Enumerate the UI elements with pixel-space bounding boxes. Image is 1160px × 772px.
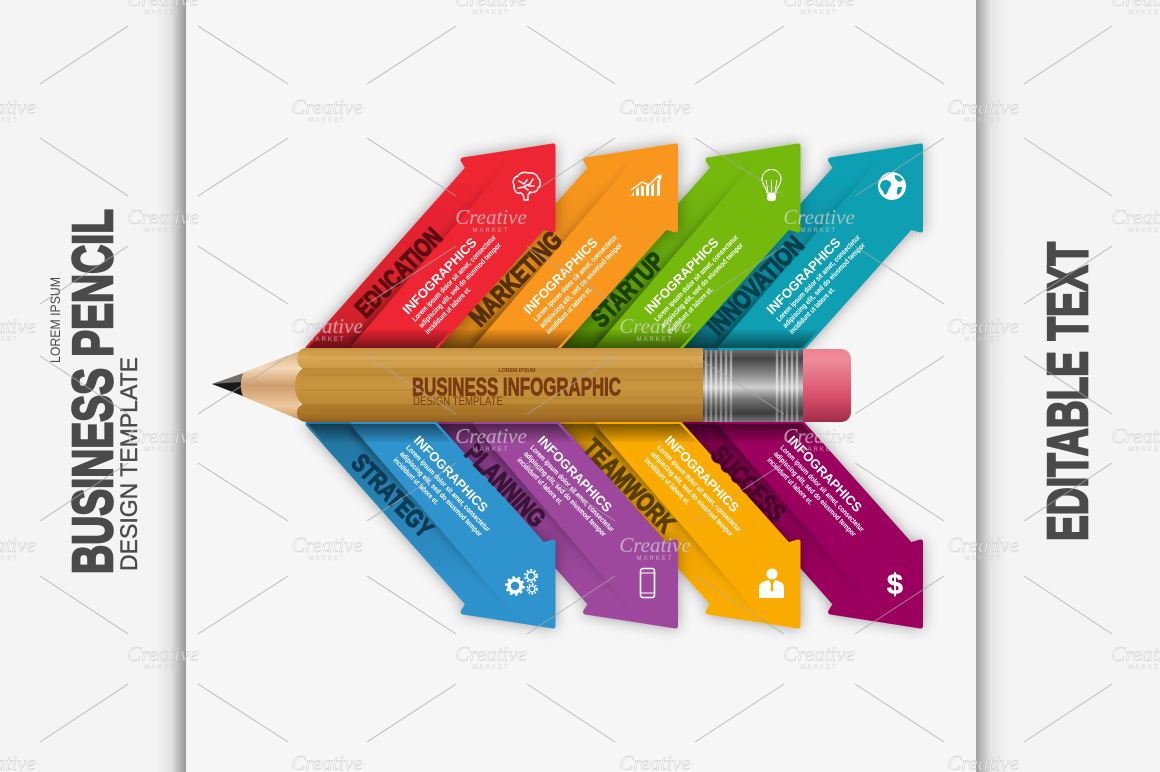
- watermark logos: MARKET: [308, 556, 346, 562]
- text block: startup: adipiscing elit, sed do eiusmod tempor: [659, 241, 745, 330]
- watermark logos: Creative: [619, 95, 691, 119]
- watermark logos: MARKET: [472, 228, 510, 234]
- watermark logos: MARKET: [964, 337, 1002, 343]
- pencil lead: [212, 374, 243, 396]
- watermark logos: Creative: [947, 533, 1019, 557]
- watermark logos: MARKET: [800, 665, 838, 671]
- watermark logos: Creative: [127, 205, 199, 229]
- left side title: [47, 209, 143, 574]
- title: strategy: STRATEGY: [346, 449, 438, 543]
- arrow: innovation: [676, 146, 920, 348]
- watermark logos: MARKET: [144, 228, 182, 234]
- watermark logos: MARKET: [964, 118, 1002, 124]
- design template subheading: DESIGN TEMPLATE: [116, 357, 143, 571]
- text block: startup: Lorem ipsum dolor sit amet, consectetur: [652, 233, 740, 323]
- text block: success: adipiscing elit, sed do eiusmod tempor: [772, 449, 858, 538]
- text block: marketing: adipiscing elit, sed do eiusmod tempor: [538, 241, 624, 330]
- watermark logos: MARKET: [144, 665, 182, 671]
- title: startup: STARTUP: [586, 247, 670, 333]
- text block: startup: incididunt ut labore et.: [665, 285, 715, 336]
- watermark logos: Creative: [455, 205, 527, 229]
- icon: growth chart: [631, 174, 662, 196]
- pencil wood top facet: [297, 348, 703, 369]
- icon: businessman: [759, 568, 784, 598]
- watermark logos: Creative: [619, 314, 691, 338]
- arrow: success: [676, 424, 920, 626]
- wood grain: [300, 355, 700, 416]
- icon: smartphone: [640, 568, 654, 598]
- watermark logos: MARKET: [636, 118, 674, 124]
- pencil label: [412, 368, 621, 408]
- watermark logos: MARKET: [472, 10, 510, 16]
- watermark logos: MARKET: [800, 447, 838, 453]
- pencil cone: [213, 351, 300, 420]
- icon: globe: [878, 172, 906, 200]
- title: teamwork: TEAMWORK: [578, 434, 680, 539]
- text block: strategy: Lorem ipsum dolor sit amet, consectetur: [404, 443, 492, 534]
- arrow: planning: [430, 424, 676, 626]
- watermark logos: Creative: [127, 424, 199, 448]
- pencil wood middle facet: [295, 368, 703, 405]
- watermark logos: Creative: [291, 533, 363, 557]
- text block: strategy: incididunt ut labore et.: [391, 456, 441, 506]
- watermark logos: MARKET: [144, 10, 182, 16]
- text block: success: INFOGRAPHICS: [785, 433, 865, 515]
- watermark logos: Creative: [783, 205, 855, 229]
- arrow: teamwork: [553, 424, 798, 626]
- text block: marketing: Lorem ipsum dolor sit amet, consectetur: [531, 233, 619, 323]
- arrow: marketing: [430, 146, 676, 348]
- text block: planning: incididunt ut labore et.: [515, 456, 565, 506]
- right side title: editable text: EDITABLE TEXT: [1036, 242, 1100, 541]
- text block: marketing: incididunt ut labore et.: [544, 285, 594, 336]
- text block: education: incididunt ut labore et.: [423, 285, 473, 336]
- text block: startup: INFOGRAPHICS: [641, 234, 722, 317]
- watermark logos: MARKET: [800, 228, 838, 234]
- icon: gears: [506, 570, 537, 594]
- watermark logos: Creative: [291, 95, 363, 119]
- text block: innovation: Lorem ipsum dolor sit amet, consectetur: [774, 233, 862, 323]
- pencil label: BUSINESS INFOGRAPHIC: [412, 374, 621, 402]
- title: planning: PLANNING: [459, 439, 551, 533]
- ferrule ribs: [706, 350, 797, 422]
- watermark logos: Creative: [947, 314, 1019, 338]
- icon: light bulb: [762, 170, 781, 201]
- arrow: education: [308, 146, 553, 348]
- text block: success: incididunt ut labore et.: [765, 456, 815, 506]
- pencil: [212, 348, 851, 422]
- text block: teamwork: Lorem ipsum dolor sit amet, consectetur: [655, 443, 743, 534]
- watermark logos: MARKET: [636, 556, 674, 562]
- arrow: strategy: [308, 424, 553, 626]
- watermark logos: MARKET: [800, 10, 838, 16]
- text block: marketing: INFOGRAPHICS: [520, 234, 601, 317]
- watermark logos: Creative: [127, 642, 199, 666]
- watermark logos: MARKET: [308, 337, 346, 343]
- title: innovation: INNOVATION: [702, 231, 810, 341]
- watermark logos: MARKET: [472, 447, 510, 453]
- text block: innovation: adipiscing elit, sed do eiusmod tempor: [781, 241, 867, 330]
- watermark logos: Creative: [783, 642, 855, 666]
- text block: teamwork: incididunt ut labore et.: [642, 456, 692, 506]
- watermark logos: MARKET: [144, 447, 182, 453]
- pencil ferrule: [703, 350, 803, 422]
- text block: education: INFOGRAPHICS: [399, 234, 480, 317]
- business pencil heading: BUSINESS PENCIL: [61, 209, 125, 574]
- bottom arrow titles: [346, 434, 791, 543]
- text block: planning: INFOGRAPHICS: [535, 433, 615, 515]
- text block: teamwork: adipiscing elit, sed do eiusmod tempor: [649, 449, 735, 538]
- watermark logos: MARKET: [472, 665, 510, 671]
- pencil wood bottom facet: [297, 404, 703, 422]
- title: marketing: MARKETING: [464, 226, 568, 332]
- watermark logos: Creative: [619, 533, 691, 557]
- icon: brain: [513, 172, 540, 200]
- text block: planning: adipiscing elit, sed do eiusmod tempor: [522, 449, 608, 538]
- text block: success: Lorem ipsum dolor sit amet, consectetur: [778, 443, 866, 534]
- arrow: startup: [553, 146, 798, 348]
- watermark logos: Creative: [455, 642, 527, 666]
- text block: innovation: incididunt ut labore et.: [787, 285, 837, 336]
- pencil label: DESIGN TEMPLATE: [413, 396, 503, 408]
- title: education: EDUCATION: [350, 223, 448, 323]
- pencil label: LOREM IPSUM: [498, 368, 536, 374]
- watermark logos: Creative: [783, 424, 855, 448]
- watermark logos: Creative: [947, 95, 1019, 119]
- watermark logos: MARKET: [308, 118, 346, 124]
- watermark logos: MARKET: [964, 556, 1002, 562]
- text block: innovation: INFOGRAPHICS: [763, 234, 844, 317]
- text block: education: Lorem ipsum dolor sit amet, consectetur: [410, 233, 498, 323]
- title: success: SUCCESS: [705, 441, 791, 528]
- watermark logos: MARKET: [636, 337, 674, 343]
- text block: strategy: adipiscing elit, sed do eiusmod tempor: [398, 449, 484, 538]
- text block: education: adipiscing elit, sed do eiusmod tempor: [417, 241, 503, 330]
- top arrow titles: [350, 223, 810, 341]
- pencil eraser: [803, 349, 851, 422]
- icon: dollar: $: [887, 569, 903, 601]
- lorem ipsum label: LOREM IPSUM: [47, 277, 63, 363]
- watermark logos: Creative: [291, 314, 363, 338]
- text block: strategy: INFOGRAPHICS: [411, 433, 491, 515]
- text block: teamwork: INFOGRAPHICS: [662, 433, 742, 515]
- text block: planning: Lorem ipsum dolor sit amet, consectetur: [528, 443, 616, 534]
- watermark logos: Creative: [455, 424, 527, 448]
